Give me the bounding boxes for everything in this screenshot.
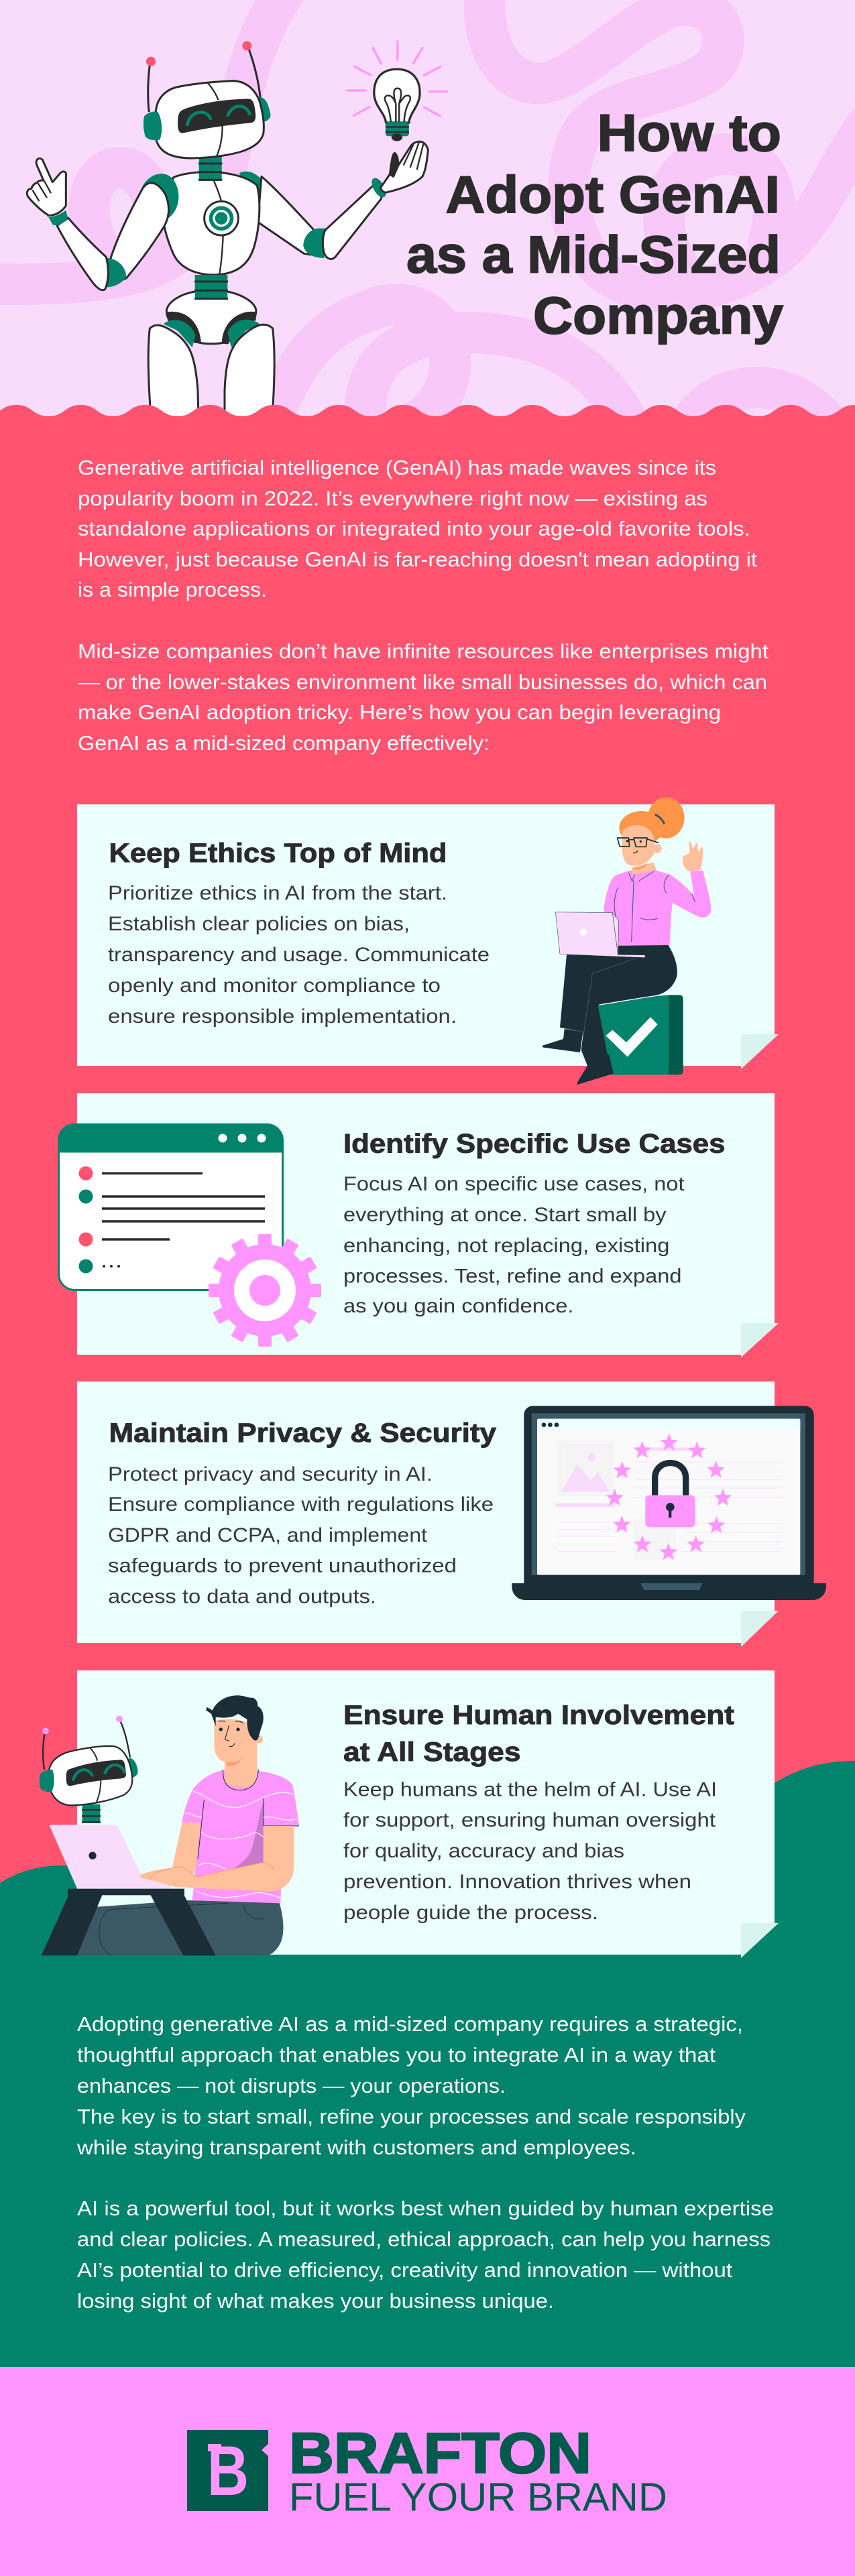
illustration: man working with robot [40, 1695, 299, 1955]
logo wordmark: BRAFTON [289, 2422, 591, 2486]
intro text: popularity boom in 2022. It’s everywhere right now — existing as [78, 487, 707, 510]
card body text: GDPR and CCPA, and implement [108, 1524, 428, 1546]
outro text: while staying transparent with customers and employees. [76, 2136, 636, 2159]
card body text: ensure responsible implementation. [108, 1005, 457, 1028]
card body text: access to data and outputs. [108, 1586, 376, 1607]
robot illustration [27, 41, 428, 436]
intro text: However, just because GenAI is far-reaching doesn't mean adopting it [78, 548, 757, 571]
man [58, 1695, 299, 1955]
intro text: Generative artificial intelligence (GenAI) has made waves since its [78, 456, 716, 479]
card body text: prevention. Innovation thrives when [343, 1871, 691, 1893]
intro text: — or the lower-stakes environment like small businesses do, which can [78, 670, 767, 694]
intro text: GenAI as a mid-sized company effectively: [78, 731, 490, 755]
background swirls [0, 0, 855, 430]
outro text: AI is a powerful tool, but it works best when guided by human expertise [77, 2197, 774, 2220]
outro text: losing sight of what makes your business unique. [77, 2289, 554, 2313]
card body text [343, 1779, 717, 1924]
title [406, 103, 783, 345]
neck segments [194, 156, 228, 300]
intro text: is a simple process. [78, 578, 267, 601]
intro text [78, 456, 768, 755]
card body text: Protect privacy and security in AI. [108, 1463, 433, 1485]
brafton logo [187, 2422, 667, 2519]
header background [0, 0, 855, 469]
card body text: Establish clear policies on bias, [108, 913, 410, 935]
outro text: AI’s potential to drive efficiency, creativity and innovation — without [77, 2258, 732, 2282]
card body text: safeguards to prevent unauthorized [108, 1555, 457, 1577]
card body text [108, 882, 490, 1028]
card folded corner [741, 1034, 779, 1069]
card body text: openly and monitor compliance to [108, 975, 441, 997]
card folded corner [741, 1923, 779, 1958]
card heading: Keep Ethics Top of Mind [109, 839, 447, 868]
panel: ensure human involvement [40, 1670, 779, 1958]
card body text: for support, ensuring human oversight [343, 1809, 716, 1831]
illustration: woman with laptop on checkmark box [542, 797, 711, 1085]
right arm [239, 141, 428, 259]
legs and pelvis [148, 292, 274, 436]
logo mark: B [207, 2432, 249, 2510]
red wavy background section [0, 405, 855, 1977]
card body text: people guide the process. [343, 1902, 598, 1924]
laptop and table [42, 1825, 294, 1955]
title: How to [597, 103, 781, 162]
illustration: laptop with padlock and stars [512, 1406, 826, 1600]
footer band [0, 2367, 855, 2576]
card heading [343, 1701, 734, 1767]
card body text: processes. Test, refine and expand [343, 1266, 681, 1287]
card folded corner [741, 1611, 779, 1647]
antennas [146, 41, 260, 112]
panel: identify specific use cases [58, 1093, 779, 1357]
panel: maintain privacy and security [77, 1382, 826, 1647]
outro text: The key is to start small, refine your processes and scale responsibly [77, 2105, 746, 2128]
illustration: app window [58, 1123, 284, 1290]
card body text [108, 1463, 494, 1607]
title: Adopt GenAI [445, 165, 780, 224]
card background [77, 804, 775, 1066]
card body text: transparency and usage. Communicate [108, 944, 490, 966]
intro text: Mid-size companies don’t have infinite resources like enterprises might [78, 639, 768, 663]
card body text: everything at once. Start small by [343, 1204, 667, 1226]
outro text: enhances — not disrupts — your operations. [77, 2074, 506, 2097]
card heading: at All Stages [343, 1737, 520, 1767]
outro text: thoughtful approach that enables you to integrate AI in a way that [77, 2043, 716, 2067]
card body text: Prioritize ethics in AI from the start. [108, 882, 447, 904]
logo mark [187, 2430, 268, 2511]
card heading: Identify Specific Use Cases [343, 1129, 726, 1158]
card body text: Ensure compliance with regulations like [108, 1493, 494, 1516]
card heading: Maintain Privacy & Security [109, 1418, 497, 1448]
icon: gear [209, 1234, 321, 1347]
outro text: Adopting generative AI as a mid-sized company requires a strategic, [77, 2012, 743, 2036]
small robot [40, 1715, 138, 1823]
left arm [27, 158, 178, 290]
card background [77, 1382, 775, 1643]
torso [164, 172, 260, 275]
intro text: make GenAI adoption tricky. Here’s how you can begin leveraging [78, 700, 721, 724]
title: Company [533, 286, 783, 345]
intro text: standalone applications or integrated into your age-old favorite tools. [78, 517, 750, 540]
title: as a Mid-Sized [406, 225, 781, 284]
logo tagline: FUEL YOUR BRAND [289, 2475, 667, 2519]
card heading: Ensure Human Involvement [343, 1701, 734, 1730]
card body text: as you gain confidence. [343, 1295, 574, 1317]
panel: keep ethics top of mind [77, 797, 779, 1085]
card background [77, 1093, 775, 1355]
card background [77, 1670, 775, 1955]
outro text: and clear policies. A measured, ethical approach, can help you harness [77, 2227, 771, 2251]
card body text: Focus AI on specific use cases, not [343, 1173, 685, 1195]
icon: light bulb [347, 42, 447, 141]
card body text: enhancing, not replacing, existing [343, 1235, 669, 1257]
outro text [76, 2012, 774, 2313]
card body text [343, 1173, 685, 1317]
card body text: Keep humans at the helm of AI. Use AI [343, 1779, 717, 1800]
robot head [144, 81, 271, 158]
green wavy background section [0, 1761, 855, 2370]
card body text: for quality, accuracy and bias [343, 1840, 624, 1862]
card folded corner [741, 1323, 779, 1357]
